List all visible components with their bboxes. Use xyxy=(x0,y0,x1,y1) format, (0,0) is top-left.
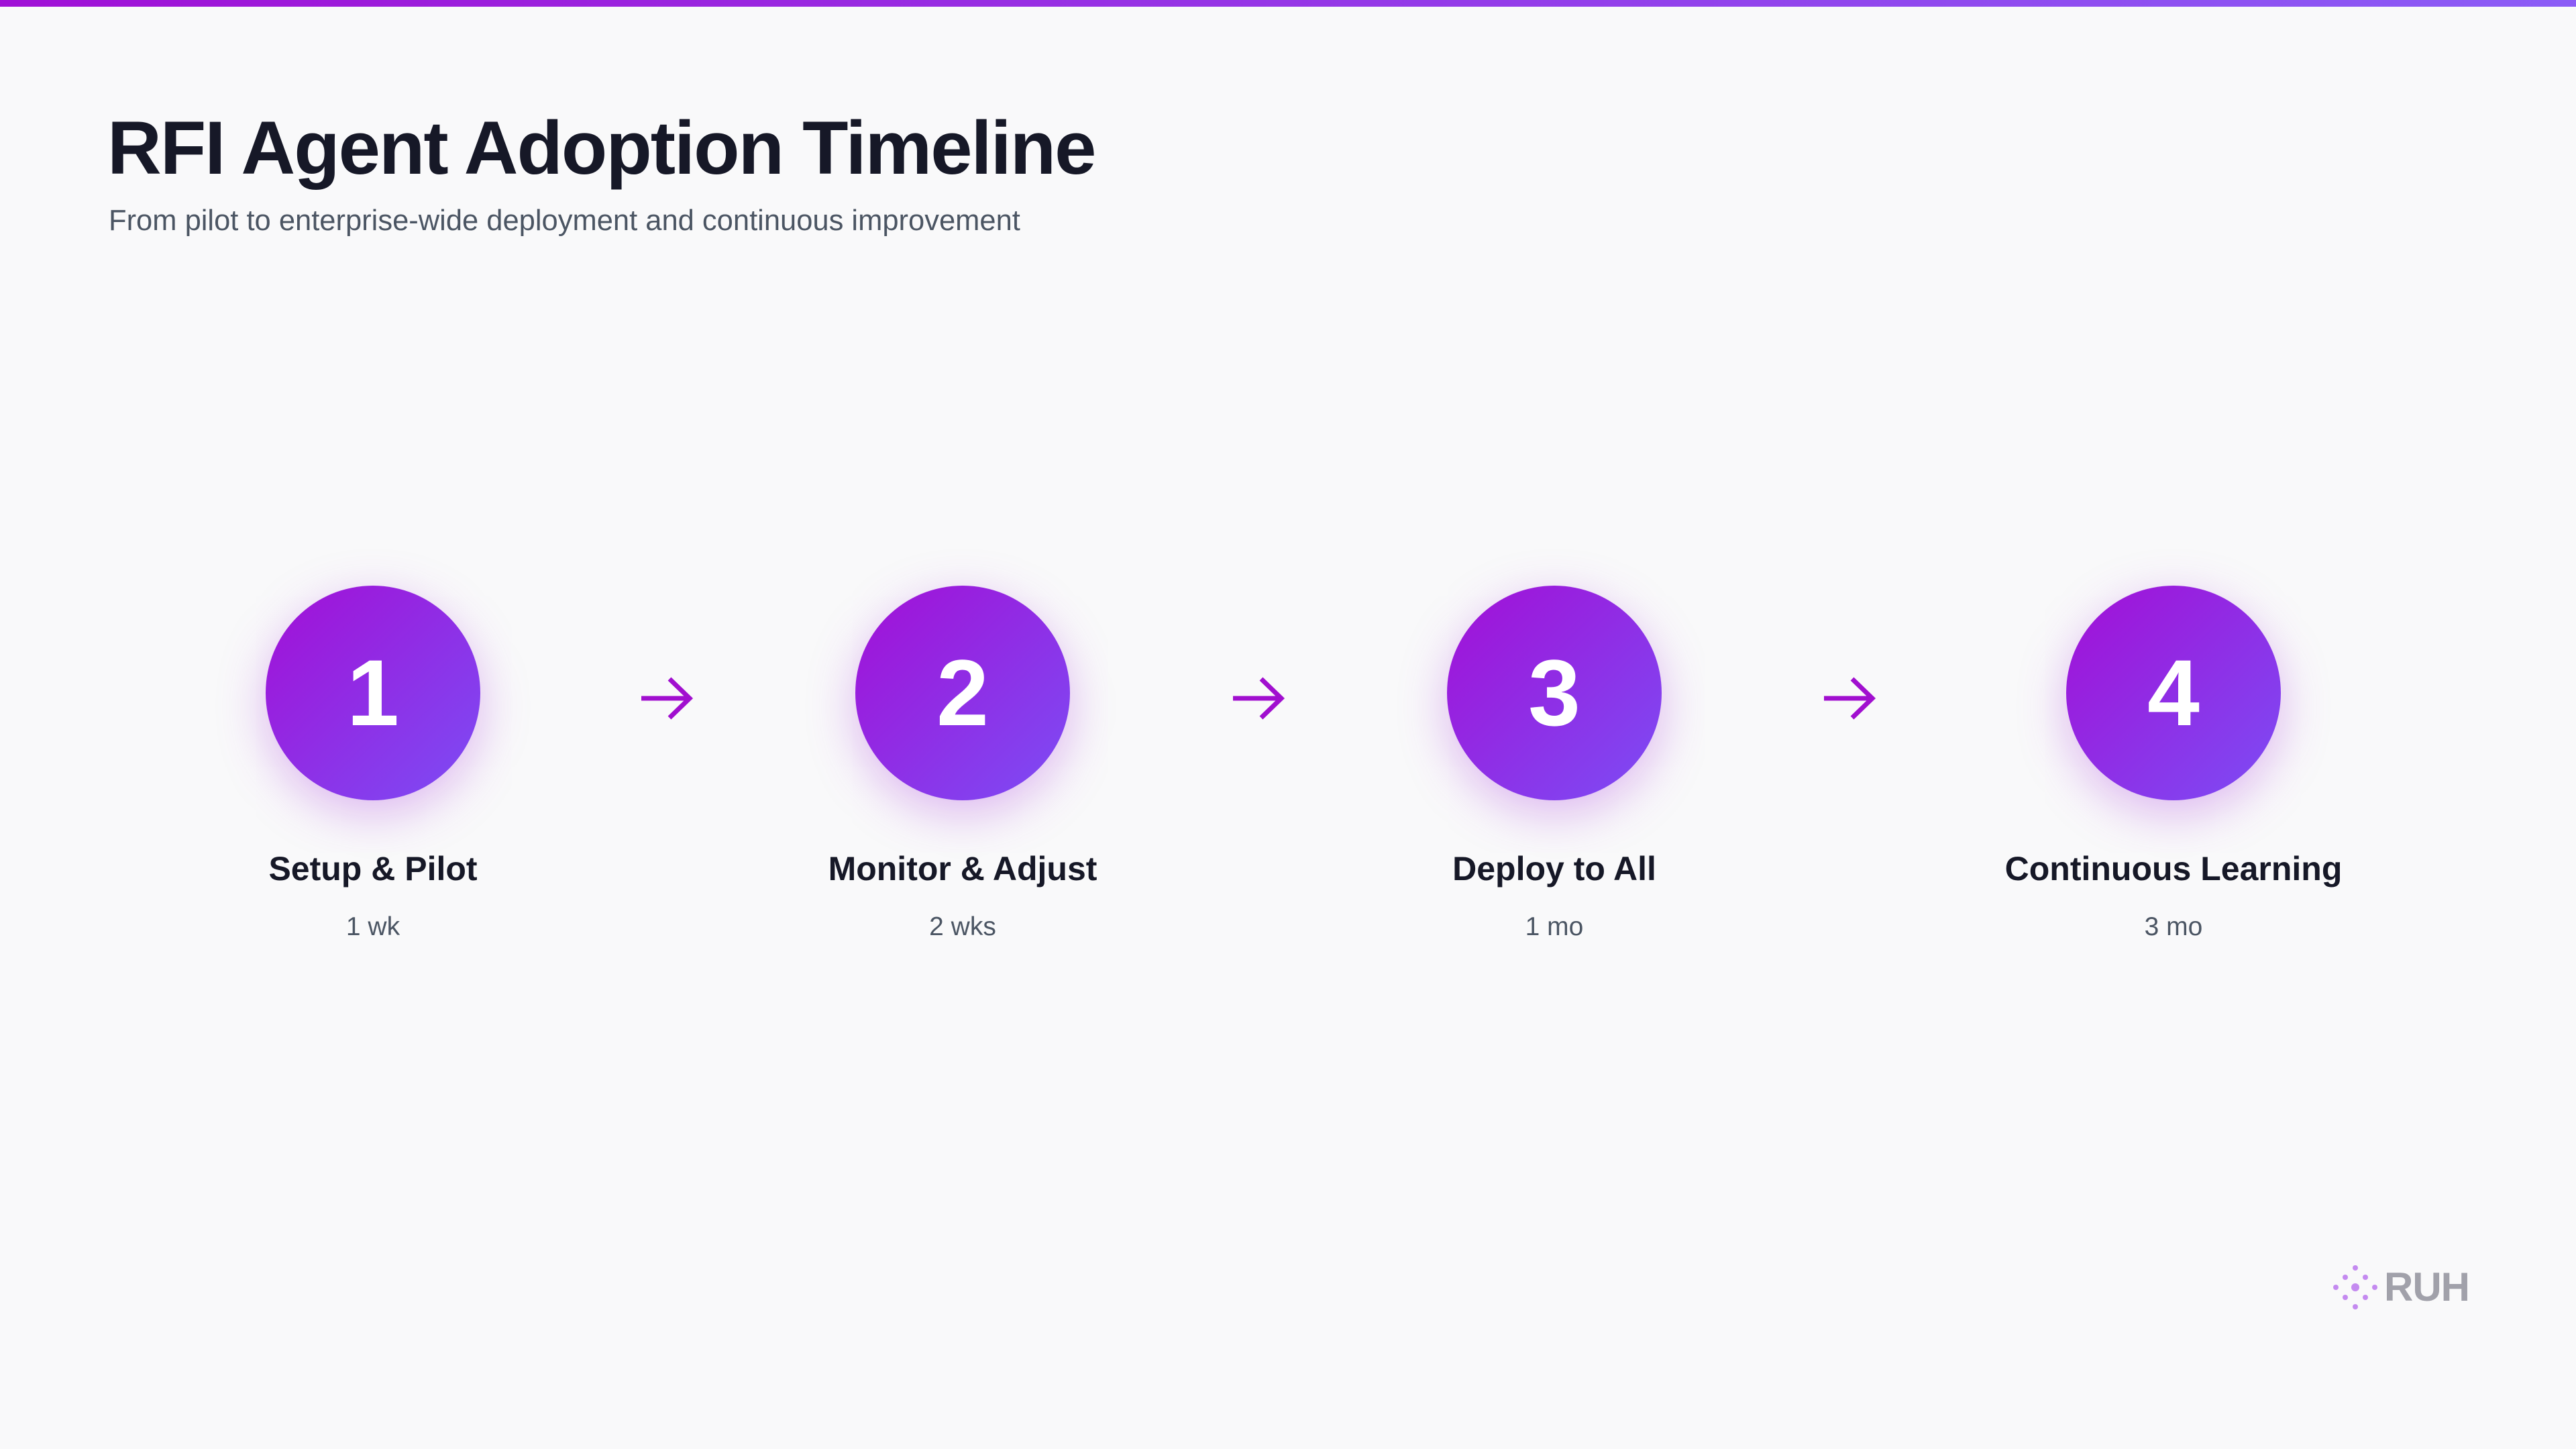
circle 2 xyxy=(855,586,1070,800)
circle 4 xyxy=(2066,586,2281,800)
step 1 xyxy=(241,574,505,941)
logo text: RUH xyxy=(2384,1265,2469,1309)
duration 1: 1 wk xyxy=(346,912,400,941)
label 4: Continuous Learning xyxy=(2005,850,2342,888)
duration 4: 3 mo xyxy=(2145,912,2202,941)
circle 2: 2 xyxy=(936,640,989,745)
duration 2: 2 wks xyxy=(929,912,996,941)
step 4 xyxy=(2005,574,2342,941)
duration 3: 1 mo xyxy=(1525,912,1583,941)
circle 1: 1 xyxy=(347,640,399,745)
circle 4: 4 xyxy=(2147,640,2200,745)
icon: dots xyxy=(2333,1265,2377,1309)
arrow 1 xyxy=(641,678,693,719)
title: RFI Agent Adoption Timeline xyxy=(107,106,1095,190)
label 2: Monitor & Adjust xyxy=(828,850,1097,888)
arrow 3 xyxy=(1824,678,1876,719)
circle 3: 3 xyxy=(1528,640,1580,745)
subtitle: From pilot to enterprise-wide deployment and continuous improvement xyxy=(109,205,1020,237)
arrow 2 xyxy=(1233,678,1285,719)
step 2 xyxy=(828,574,1097,941)
label 1: Setup & Pilot xyxy=(268,850,478,888)
logo xyxy=(2333,1265,2469,1309)
circle 3 xyxy=(1447,586,1662,800)
label 3: Deploy to All xyxy=(1452,850,1656,888)
step 3 xyxy=(1422,574,1686,941)
circle 1 xyxy=(266,586,480,800)
